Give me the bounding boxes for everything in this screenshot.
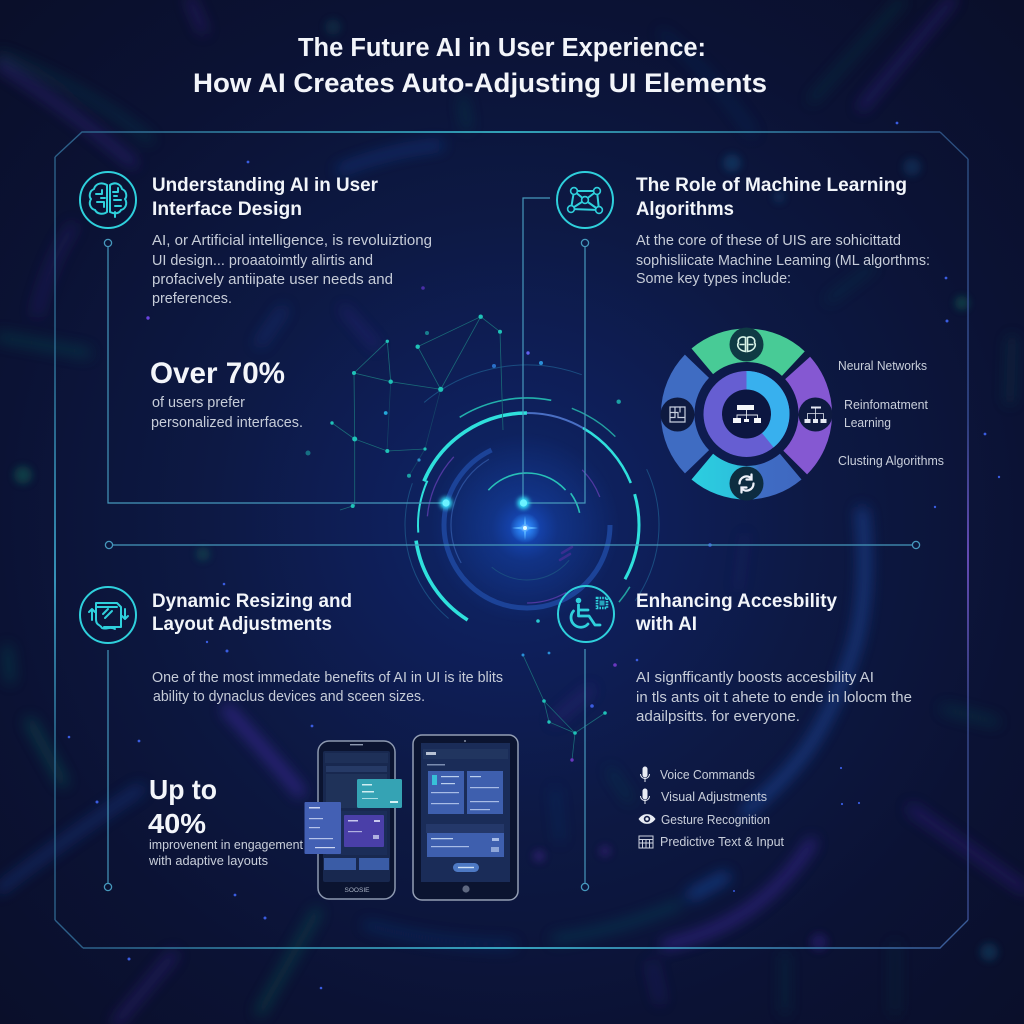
feature list: Gesture Recognition bbox=[661, 812, 770, 827]
heading: Enhancing Accesbility bbox=[636, 591, 837, 612]
icon: microphone bbox=[640, 788, 650, 804]
title bbox=[193, 34, 767, 98]
icon: wheelchair and chip bbox=[558, 586, 614, 642]
icon: microphone bbox=[640, 766, 650, 782]
stat: over 70%: personalized interfaces. bbox=[151, 415, 303, 431]
heading bbox=[636, 175, 907, 220]
title: How AI Creates Auto-Adjusting UI Elements bbox=[193, 68, 767, 98]
text block: At the core of these of UIS are sohicittatd bbox=[636, 233, 901, 249]
text block: UI design... proaatoimtly alirtis and bbox=[152, 253, 373, 269]
icon: table bbox=[639, 836, 653, 848]
heading bbox=[152, 175, 379, 220]
stat: up to 40% bbox=[148, 774, 303, 868]
text block bbox=[636, 233, 930, 287]
panel: machine learning bbox=[557, 172, 944, 511]
feature list: Predictive Text & Input bbox=[660, 834, 784, 849]
text block: Some key types include: bbox=[636, 271, 791, 287]
central rings bbox=[302, 300, 752, 750]
icon: hierarchy centre bbox=[733, 405, 761, 423]
text block: profacively antiipate user needs and bbox=[152, 272, 393, 288]
icon: eye bbox=[638, 814, 656, 824]
icon: refresh bbox=[739, 474, 754, 492]
icon: network bbox=[557, 172, 613, 228]
card: purple bbox=[344, 815, 384, 847]
feature list: Visual Adjustments bbox=[661, 789, 767, 804]
heading: Understanding AI in User bbox=[152, 175, 379, 196]
icon: brain small bbox=[738, 337, 755, 352]
stat: over 70% bbox=[150, 357, 303, 431]
stat: up to 40%: 40% bbox=[148, 808, 206, 839]
panel: dynamic resizing bbox=[80, 587, 518, 900]
scattered particles bbox=[68, 122, 1000, 989]
icon: brain bbox=[80, 172, 136, 228]
icon: resize bbox=[80, 587, 136, 643]
text block: in tls ants oit t ahete to ende in lolocm the bbox=[636, 690, 912, 706]
donut labels: Reinfomatment bbox=[844, 397, 928, 412]
title: The Future AI in User Experience: bbox=[298, 34, 706, 62]
text block: AI, or Artificial intelligence, is revoluiztiong bbox=[152, 233, 432, 249]
donut labels bbox=[838, 358, 944, 468]
connector lines bbox=[104, 198, 920, 891]
text block: adailpsitts. for everyone. bbox=[636, 709, 800, 725]
phone mockup bbox=[304, 741, 402, 899]
icon: grid chip bbox=[670, 407, 685, 422]
text block: ability to dynaclus devices and sceen sizes. bbox=[153, 689, 425, 705]
heading: with AI bbox=[635, 614, 697, 635]
donut chart bbox=[649, 317, 944, 511]
heading bbox=[152, 591, 352, 635]
outer frame bbox=[55, 132, 968, 948]
icon: hierarchy small bbox=[804, 406, 826, 423]
text block bbox=[152, 233, 432, 307]
heading: The Role of Machine Learning bbox=[636, 175, 907, 196]
text block bbox=[636, 670, 912, 725]
card: blue bbox=[304, 802, 341, 854]
card: teal bbox=[357, 779, 402, 808]
text block: One of the most immedate benefits of AI in UI is ite blits bbox=[152, 670, 503, 686]
heading: Algorithms bbox=[636, 199, 734, 220]
stat: up to 40%: Up to bbox=[149, 774, 217, 805]
panel: understanding AI bbox=[80, 172, 432, 431]
heading: Interface Design bbox=[152, 199, 302, 220]
text block: AI signfficantly boosts accesbility AI bbox=[636, 670, 874, 686]
heading bbox=[635, 591, 837, 635]
stat: up to 40%: improvenent in engagement bbox=[149, 837, 303, 852]
donut labels: Learning bbox=[844, 415, 891, 430]
text block: preferences. bbox=[152, 291, 232, 307]
panel: accessibility bbox=[558, 586, 912, 849]
donut labels: Neural Networks bbox=[838, 358, 927, 373]
tablet mockup bbox=[413, 735, 518, 900]
heading: Dynamic Resizing and bbox=[152, 591, 352, 612]
text block: sophisliicate Machine Leaming (ML algorthms: bbox=[636, 253, 930, 269]
stat: over 70%: of users prefer bbox=[152, 395, 245, 411]
feature list: Voice Commands bbox=[660, 767, 755, 782]
feature list bbox=[638, 766, 784, 849]
phone mockup: SOOSIE bbox=[345, 887, 370, 894]
text block bbox=[152, 670, 503, 705]
heading: Layout Adjustments bbox=[152, 614, 332, 635]
stat: up to 40%: with adaptive layouts bbox=[148, 853, 268, 868]
donut labels: Clusting Algorithms bbox=[838, 453, 944, 468]
stat: over 70%: Over 70% bbox=[150, 357, 285, 390]
constellation network bbox=[306, 314, 621, 762]
